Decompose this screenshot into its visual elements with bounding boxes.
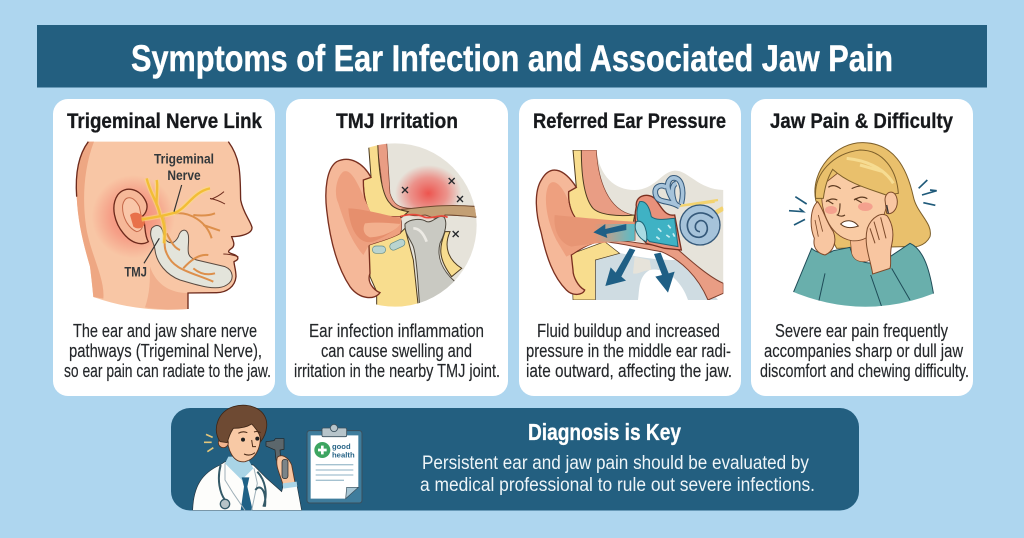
heading: TMJ irritation: TMJ Irritation [336,109,458,133]
label: TMJ: TMJ [124,264,147,280]
description [760,321,969,381]
description: Persistent ear and jaw pain should be evaluated by [422,453,809,474]
label: trigeminal nerve: Trigeminal [154,151,214,167]
panel: diagnosis is key [171,405,859,510]
description: Ear infection inflammation [309,321,484,341]
icon: clipboard [307,424,362,503]
description: accompanies sharp or dull jaw [764,341,964,361]
illustration: ear and TMJ cross-section [326,142,485,313]
description: irritation in the nearby TMJ joint. [294,361,500,381]
heading: referred ear pressure: Referred Ear Pressure [533,109,726,133]
description: Fluid buildup and increased [537,321,720,341]
heading: diagnosis is key: Diagnosis is Key [528,419,681,445]
description: so ear pain can radiate to the jaw. [64,361,271,381]
markers: pain crosses [402,178,463,237]
title: Symptoms of Ear Infection and Associated Jaw Pain [131,38,893,79]
description: pathways (Trigeminal Nerve), [69,341,262,361]
description [64,321,271,381]
description: pressure in the middle ear radi- [526,341,731,361]
pain marks [789,180,937,225]
panel: referred ear pressure [519,99,741,396]
label: good: good [332,444,351,451]
description [294,321,500,381]
title banner [37,25,987,88]
description: can cause swelling and [321,341,472,361]
label: health: health [332,452,355,459]
panel: TMJ irritation [286,99,508,396]
label: nerve: Nerve [167,167,201,183]
illustration: middle ear cross-section [536,150,723,300]
heading: jaw pain and difficulty: Jaw Pain & Difficulty [770,109,953,133]
panel: trigeminal nerve link [53,99,275,396]
description [420,453,815,496]
arrows: pressure radiating [593,224,675,293]
description [526,321,732,381]
heading: trigeminal nerve link: Trigeminal Nerve Link [67,109,262,133]
description: discomfort and chewing difficulty. [760,361,969,381]
description: Severe ear pain frequently [775,321,948,341]
description: a medical professional to rule out severe infections. [420,475,815,496]
illustration: doctor with otoscope [193,405,362,510]
description: The ear and jaw share nerve [73,321,257,341]
illustration: head profile with nerve [76,142,252,310]
illustration: woman holding jaw [783,143,937,317]
panel: jaw pain and difficulty [751,99,973,396]
description: iate outward, affecting the jaw. [526,361,732,381]
